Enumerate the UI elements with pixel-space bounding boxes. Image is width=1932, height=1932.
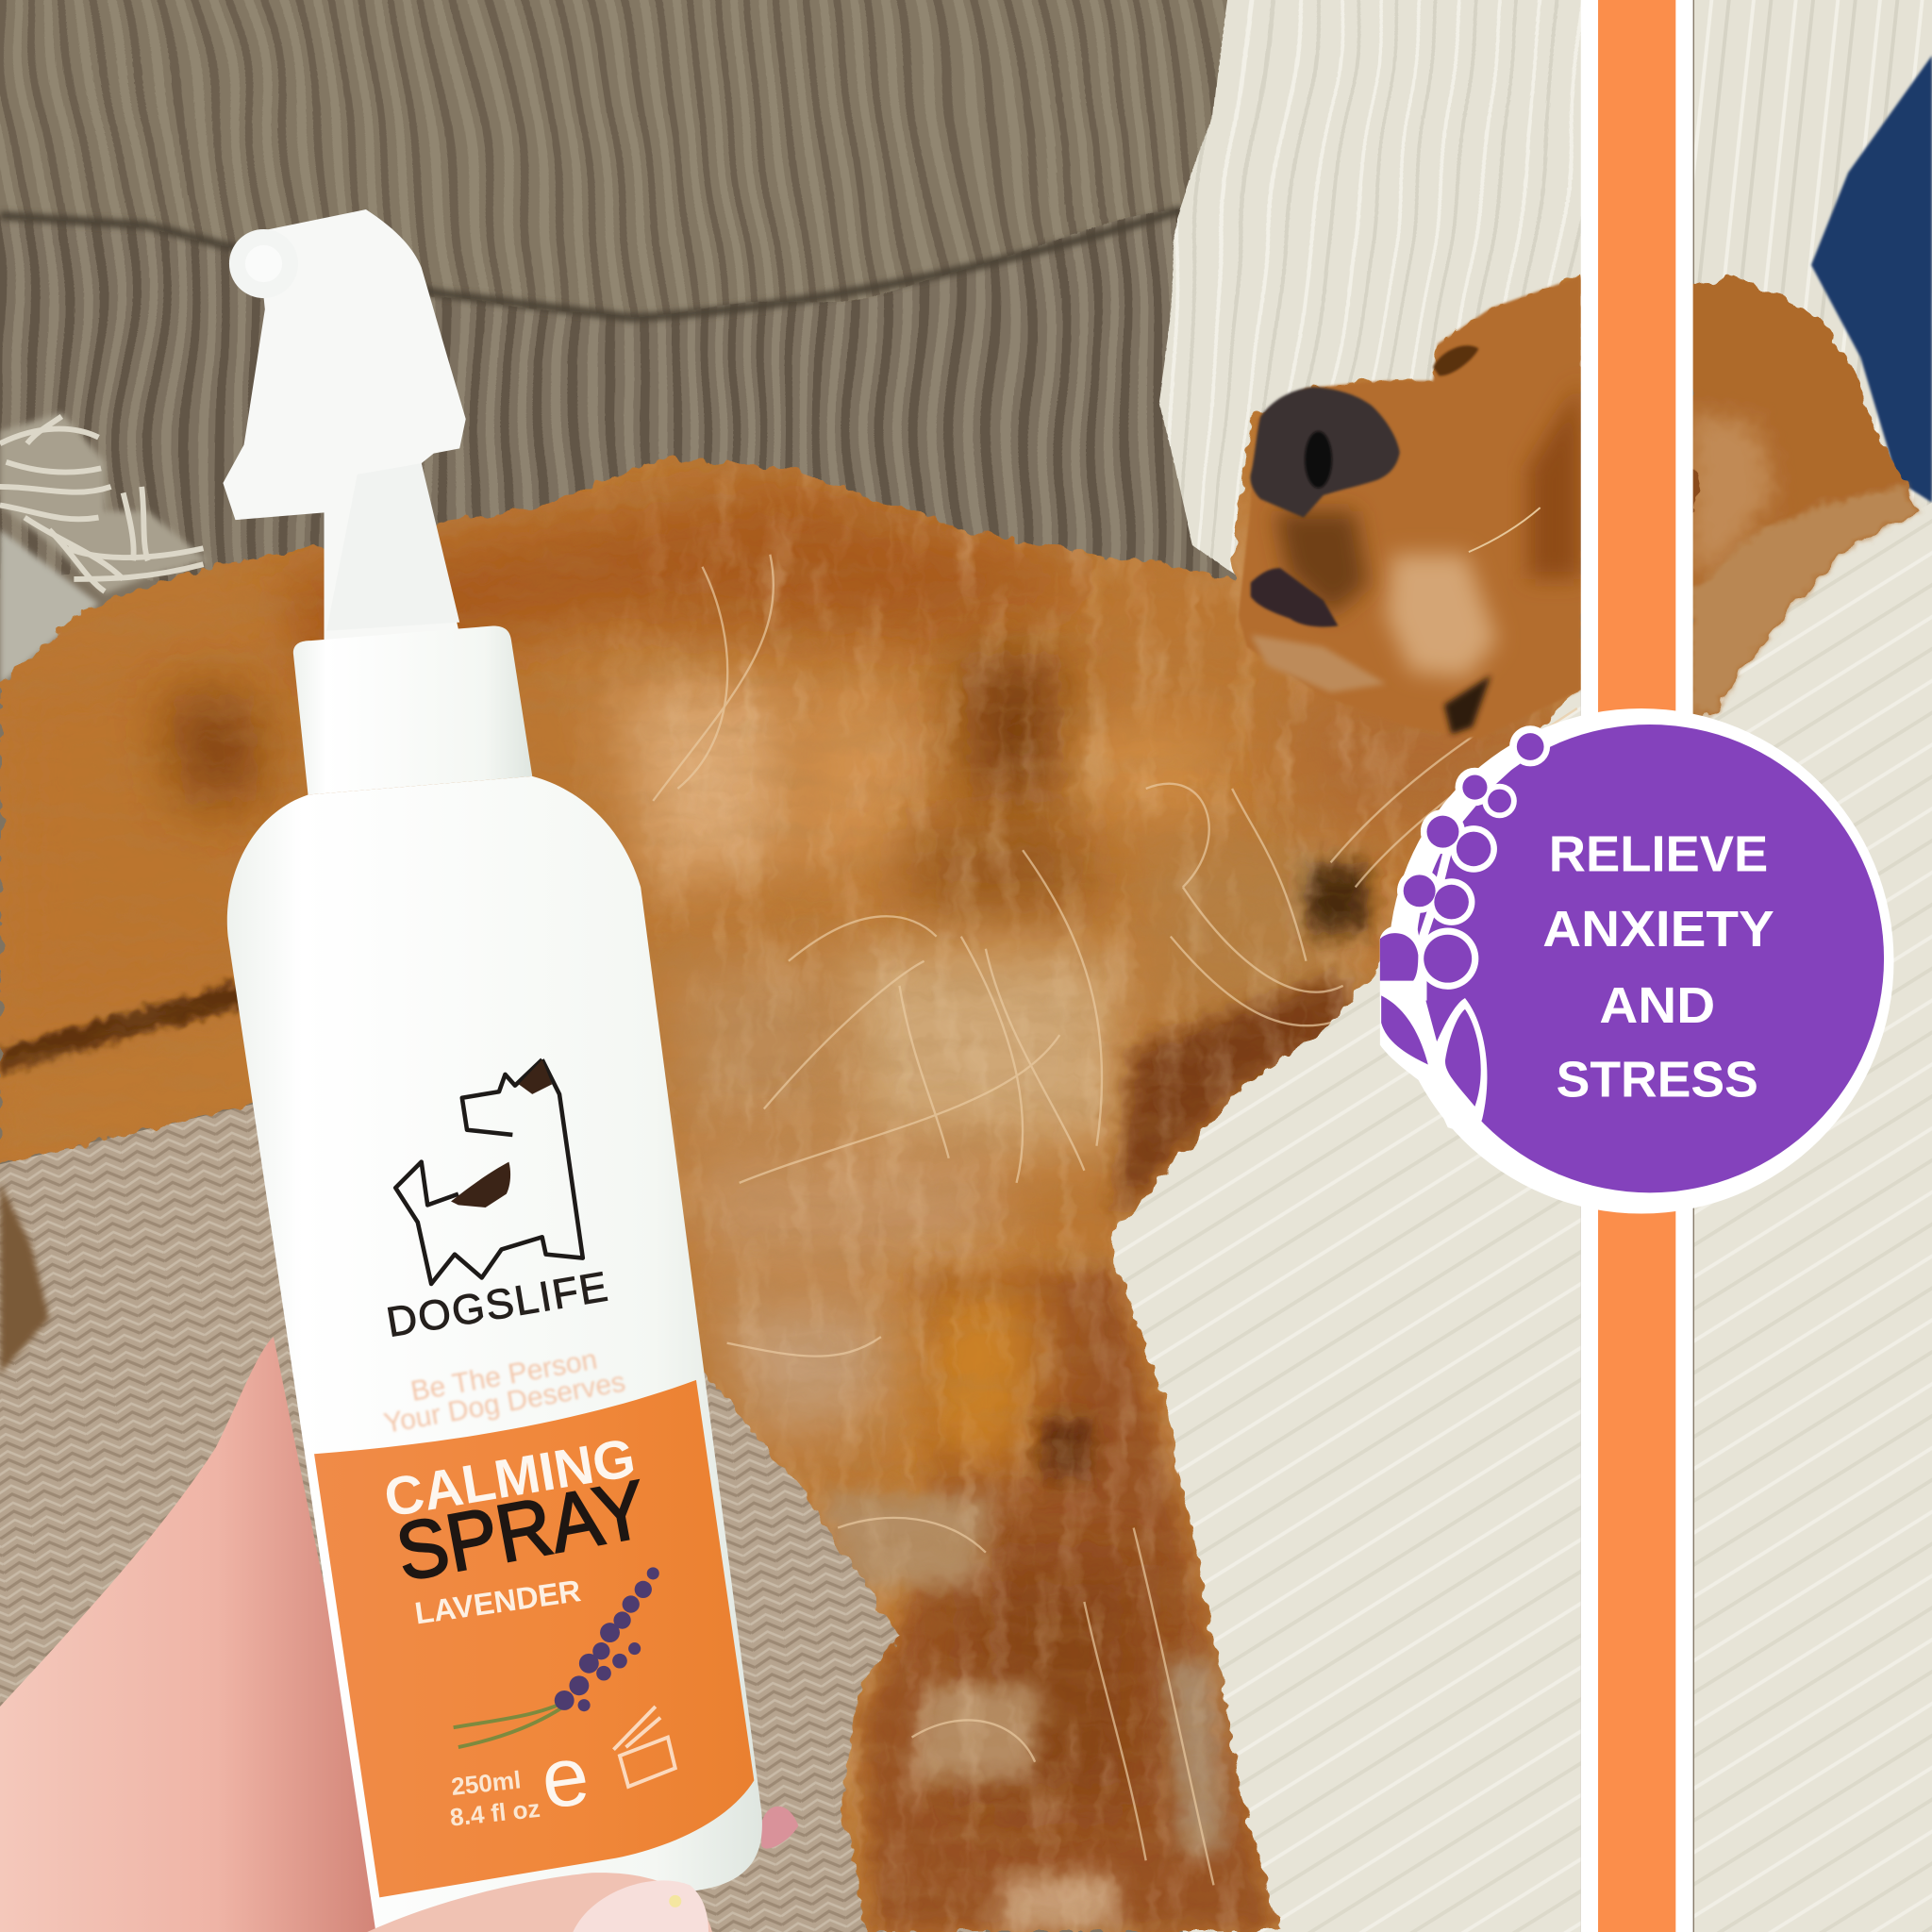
fingernail [761, 1807, 798, 1849]
body [227, 776, 762, 1932]
upper neck [1281, 690, 1581, 838]
flower backing [1380, 725, 1551, 1140]
dog paw [0, 1183, 49, 1374]
orange label [314, 1380, 754, 1897]
purple disc [1416, 724, 1884, 1192]
saddle dark patch [961, 653, 1066, 801]
neck shadow [1115, 974, 1356, 1220]
pale fur bottom [838, 949, 1122, 1146]
muzzle [1386, 555, 1497, 677]
neck [326, 463, 459, 631]
nose [1250, 387, 1400, 518]
icon: lavender sprig [454, 1567, 659, 1747]
bright orange patch [1070, 727, 1220, 813]
volume text [449, 1765, 541, 1832]
white outlines [1380, 727, 1550, 1140]
icon: lavender flower [1380, 727, 1550, 1140]
whisker [1469, 508, 1541, 552]
ear shadow [1528, 382, 1581, 579]
tassel cushion [0, 413, 207, 685]
badge text: ANXIETY [1542, 902, 1774, 958]
cream cushion upper [1152, 0, 1602, 591]
leg [862, 1269, 1275, 1932]
brand name: DOGSLIFE [383, 1263, 612, 1346]
chest orange [801, 690, 912, 862]
trigger nozzle [223, 209, 466, 641]
dog body [0, 274, 1581, 1932]
product name: LAVENDER [412, 1573, 583, 1630]
badge text: STRESS [1557, 1052, 1758, 1108]
hand [0, 1337, 394, 1932]
cap [293, 626, 532, 794]
logo dog [395, 1059, 583, 1284]
badge text: AND [1599, 978, 1715, 1034]
purple florets [1380, 733, 1544, 1107]
product name: SPRAY [390, 1463, 654, 1598]
spray bottle [223, 209, 762, 1932]
tagline: Be The Person [408, 1344, 600, 1407]
badge text [1542, 826, 1774, 1108]
badge backing [1389, 708, 1894, 1214]
finger over bottle [367, 1873, 712, 1932]
estimated sign: e [535, 1727, 594, 1826]
badge text: RELIEVE [1549, 826, 1768, 882]
navy cushion [1811, 56, 1932, 503]
product name: CALMING [380, 1427, 640, 1529]
rug [0, 1072, 986, 1932]
fur strands [653, 555, 1577, 1885]
cream sofa lower [1084, 665, 1581, 1932]
volume text: 8.4 fl oz [449, 1794, 541, 1832]
tan patches [708, 1300, 890, 1441]
closed eye [1433, 345, 1478, 375]
right photo strip [1690, 0, 1932, 1932]
dog head [1239, 276, 1581, 740]
curl on neck [1142, 838, 1356, 1023]
vertical orange stripe with white borders [1581, 0, 1693, 1932]
volume text: 250ml [450, 1765, 523, 1801]
back shade [283, 480, 1109, 690]
tagline: Your Dog Deserves [381, 1366, 627, 1440]
icon: open jar [613, 1707, 675, 1787]
badge: relieve anxiety and stress [1380, 708, 1894, 1214]
shadow under jaw [1444, 675, 1491, 734]
chest fur tan left [616, 688, 789, 887]
mouth [1251, 568, 1338, 626]
product name [380, 1427, 654, 1630]
